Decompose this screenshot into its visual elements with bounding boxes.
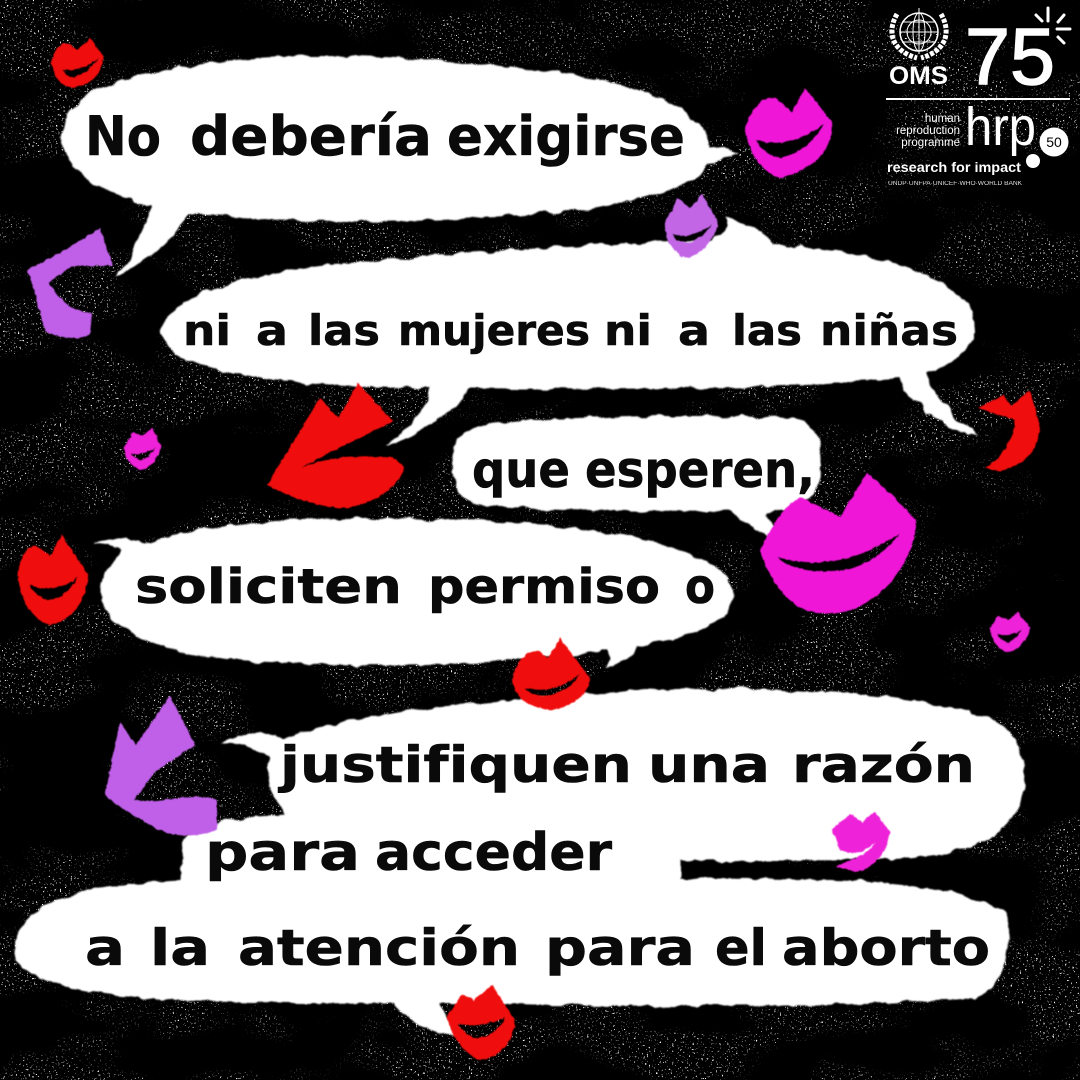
lips: purple upper left (27, 228, 113, 338)
lips: red left (18, 535, 88, 625)
line 7: a la atención para el aborto (85, 919, 990, 977)
line 1: No debería exigirse (85, 105, 685, 168)
logo: hrp programme: 50 (1046, 134, 1062, 150)
line 7: a la atención para el aborto: para (545, 919, 695, 977)
headline text in speech bubbles (85, 105, 990, 977)
logo: hrp programme: UNDP·UNFPA·UNICEF·WHO·WORLD BANK (888, 181, 1022, 187)
bubble: No debería exigirse (62, 56, 740, 277)
line 4: soliciten permiso o: soliciten (135, 559, 402, 615)
bubble: a la atención para el aborto (15, 878, 1009, 1036)
line 5: justifiquen una razón (278, 736, 975, 794)
line 1: No debería exigirse: No (85, 105, 161, 168)
bubble: justifiquen una razón (222, 689, 1026, 862)
bubble: que esperen (452, 416, 821, 546)
lips: lilac near second bubble (665, 194, 718, 258)
band joining para acceder and bubble below (650, 845, 890, 856)
line 5: justifiquen una razón: una (648, 736, 770, 794)
line 2: ni a las mujeres ni a las niñas: a (256, 306, 288, 355)
line 2: ni a las mujeres ni a las niñas: ni (183, 306, 231, 355)
line 4: soliciten permiso o: permiso (428, 559, 660, 615)
logo: WHO emblem and OMS: OMS (889, 62, 948, 90)
line 3: que esperen: que (472, 441, 570, 499)
lips: magenta top (745, 88, 832, 178)
logo: hrp programme (887, 97, 1068, 187)
logo: WHO emblem and OMS (889, 8, 948, 90)
lips: red bottom (447, 985, 515, 1060)
bubble: ni a las mujeres ni a las niñas (160, 218, 980, 445)
line 2: ni a las mujeres ni a las niñas: ni (604, 306, 652, 355)
line 7: a la atención para el aborto: a (85, 919, 125, 977)
line 1: No debería exigirse: exigirse (447, 105, 685, 168)
logo: hrp programme: programme (901, 137, 960, 149)
lips: large red (267, 383, 404, 508)
line 7: a la atención para el aborto: atención (238, 919, 520, 977)
line 2: ni a las mujeres ni a las niñas: mujeres (398, 306, 590, 355)
line 2: ni a las mujeres ni a las niñas (183, 306, 958, 355)
line 2: ni a las mujeres ni a las niñas: a (678, 306, 710, 355)
logo: hrp programme: human (925, 113, 960, 125)
logo: 75 anniversary: 75 (965, 12, 1055, 101)
line 4: soliciten permiso o (135, 559, 715, 615)
lips: red top left (51, 38, 103, 88)
line 1: No debería exigirse: debería (190, 105, 432, 168)
bubble: para acceder (180, 815, 680, 915)
line 7: a la atención para el aborto: la (150, 919, 210, 977)
lips: purple lower left (105, 696, 217, 835)
line 2: ni a las mujeres ni a las niñas: las (732, 306, 802, 355)
line 7: a la atención para el aborto: aborto (782, 919, 990, 977)
logo: hrp programme: research for impact (887, 159, 1021, 175)
logo: hrp programme: hrp (965, 97, 1036, 157)
line 4: soliciten permiso o: o (685, 559, 715, 615)
lips: magenta lower right (832, 812, 890, 872)
line 6: para acceder: acceder (375, 823, 612, 883)
line 5: justifiquen una razón: justifiquen (278, 736, 632, 794)
lips: small pink right (990, 612, 1030, 652)
line 3: que esperen: esperen, (585, 441, 815, 499)
logos block (886, 8, 1070, 187)
lips: small pink left (124, 428, 161, 470)
line 3: que esperen (472, 441, 815, 499)
lips: large magenta (760, 473, 916, 613)
line 6: para acceder: para (205, 823, 360, 883)
bubble: soliciten permiso o (95, 518, 733, 668)
line 7: a la atención para el aborto: el (715, 919, 767, 977)
divider (886, 98, 1070, 100)
lips: red centre (512, 638, 590, 710)
line 2: ni a las mujeres ni a las niñas: las (308, 306, 380, 355)
lips: red right (978, 390, 1040, 471)
line 2: ni a las mujeres ni a las niñas: niñas (820, 306, 958, 355)
line 5: justifiquen una razón: razón (792, 736, 975, 794)
line 6: para acceder (205, 823, 612, 883)
logo: hrp programme: reproduction (896, 125, 960, 137)
